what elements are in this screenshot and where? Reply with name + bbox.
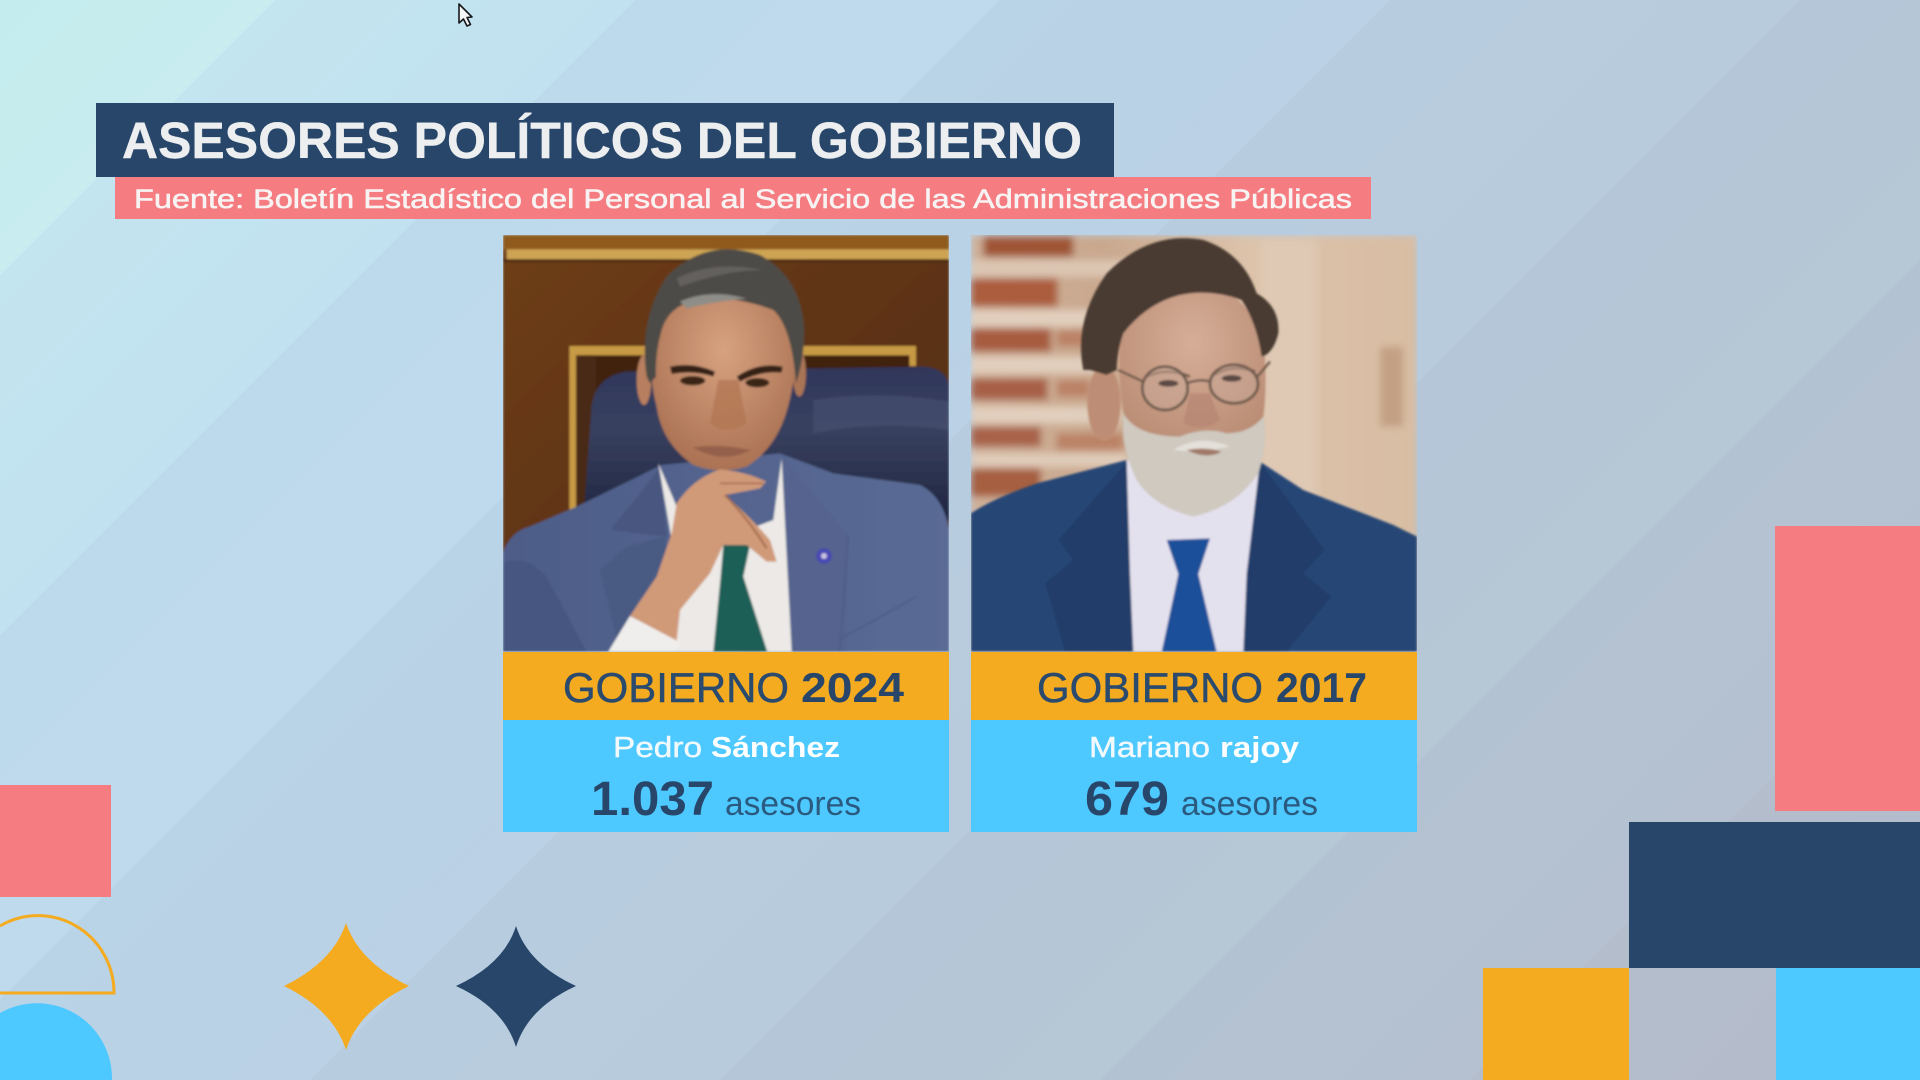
info box: Pedro xyxy=(613,732,702,764)
decor: pink square left xyxy=(0,785,111,897)
decor: orange block xyxy=(1483,968,1629,1080)
decor: pink block right xyxy=(1775,526,1920,811)
cursor icon xyxy=(459,4,472,26)
decor: blue circle xyxy=(0,1003,112,1080)
icon: orange star xyxy=(284,923,409,1050)
year bar: 2024 xyxy=(801,664,905,711)
photo: Pedro Sánchez xyxy=(503,235,949,652)
info box: 1.037 xyxy=(591,773,714,826)
source bar xyxy=(115,177,1371,219)
year bar: GOBIERNO xyxy=(563,664,789,711)
info box: Sánchez xyxy=(711,732,840,764)
info box: asesores xyxy=(1181,785,1318,823)
info box: 679 xyxy=(1085,773,1169,826)
info box: asesores xyxy=(725,785,861,823)
decor: navy block right xyxy=(1629,822,1920,968)
year bar: 2017 xyxy=(1276,664,1367,711)
info box xyxy=(503,720,949,832)
icon: navy star xyxy=(456,926,576,1047)
decor: blue block xyxy=(1776,968,1920,1080)
title bar: ASESORES POLÍTICOS DEL GOBIERNO xyxy=(122,112,1082,169)
decor: outlined half circle xyxy=(0,916,114,993)
year bar xyxy=(971,652,1417,720)
panel: Rajoy 2017 xyxy=(971,235,1417,832)
info box: rajoy xyxy=(1220,732,1299,764)
year bar: GOBIERNO xyxy=(1037,664,1263,711)
year bar xyxy=(503,652,949,720)
info box xyxy=(971,720,1417,832)
info box: Mariano xyxy=(1089,732,1210,764)
panel: Sánchez 2024 xyxy=(503,235,949,832)
source bar: Fuente: Boletín Estadístico del Personal al Servicio de las Administraciones Públicas xyxy=(134,184,1352,214)
photo: Mariano Rajoy xyxy=(971,235,1417,652)
